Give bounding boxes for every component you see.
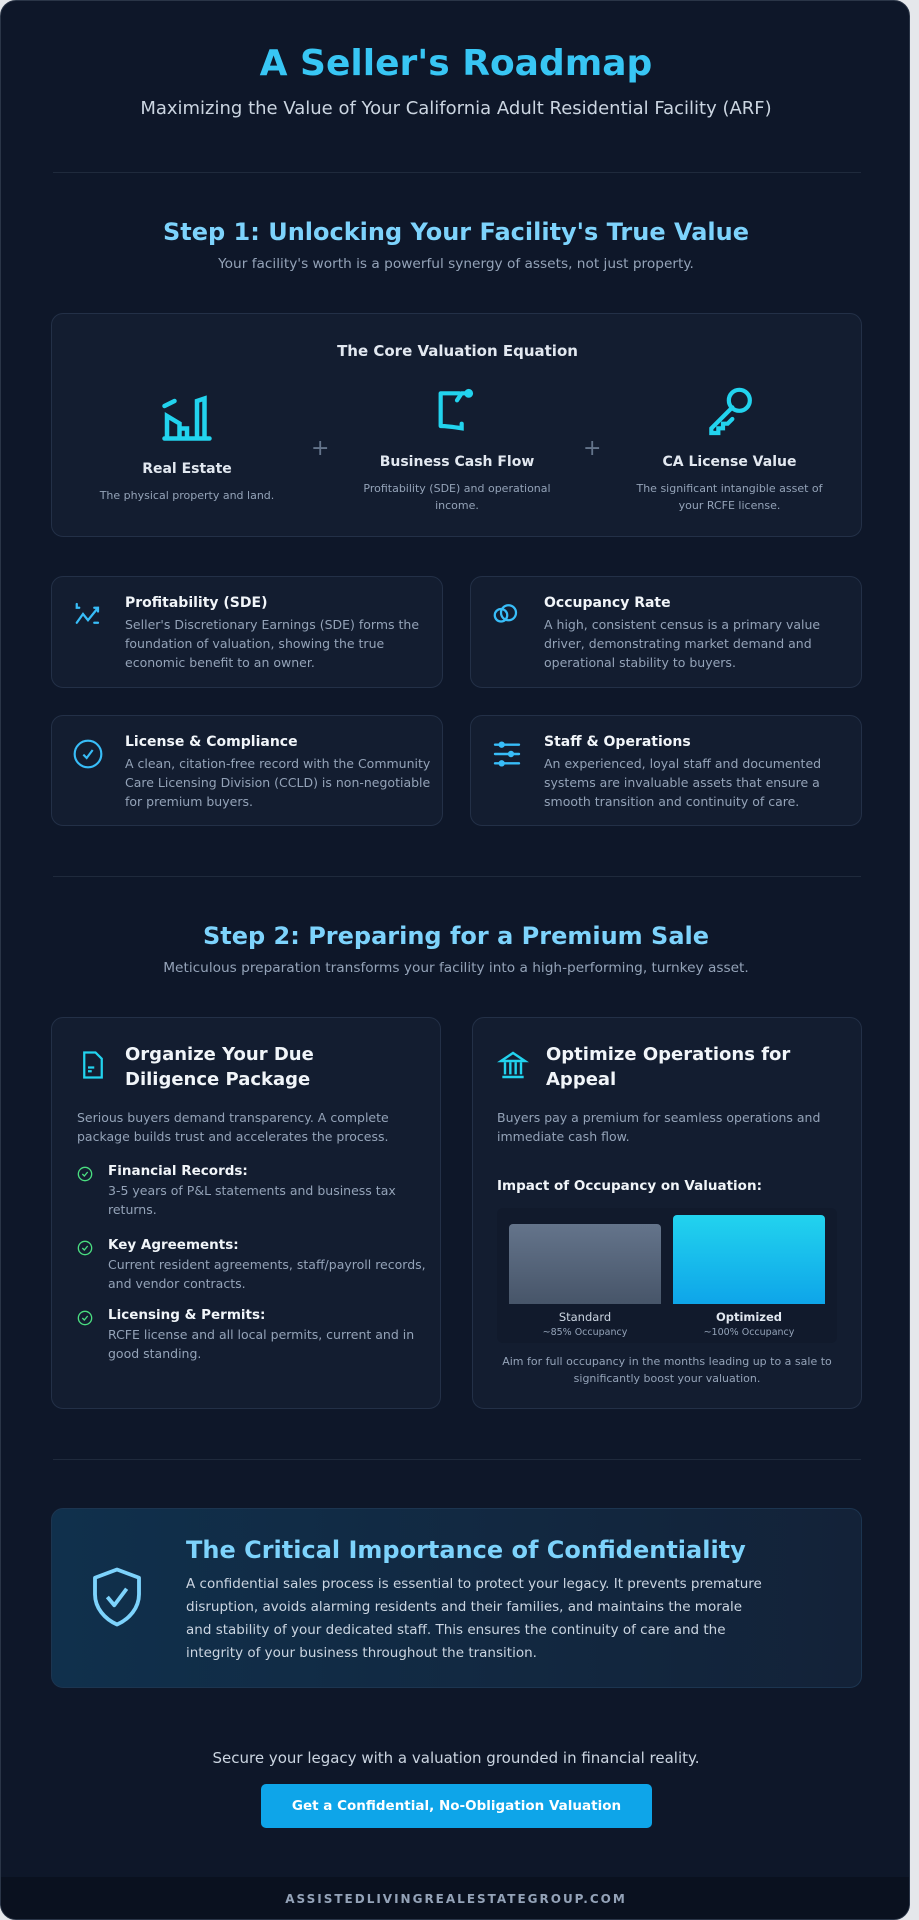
item: CA license value: The significant intangible asset of your RCFE license. bbox=[636, 482, 823, 512]
icon: circles bbox=[494, 604, 518, 623]
item: financial records bbox=[78, 1163, 396, 1217]
item: financial records: Financial Records: bbox=[108, 1163, 248, 1179]
card: staff & operations: Staff & Operations bbox=[544, 734, 691, 750]
bar chart bbox=[497, 1208, 837, 1343]
item: licensing & permits bbox=[78, 1307, 414, 1361]
panel: due diligence bbox=[51, 1017, 441, 1409]
item: real estate: The physical property and land. bbox=[100, 489, 274, 502]
label: standard: Standard bbox=[559, 1310, 611, 1324]
label: optimized: Optimized bbox=[716, 1310, 782, 1324]
card: occupancy rate bbox=[470, 576, 862, 688]
bar: standard bbox=[509, 1224, 661, 1304]
item: CA license value bbox=[636, 388, 823, 512]
label: standard bbox=[543, 1310, 627, 1338]
card: staff & operations bbox=[470, 715, 862, 826]
item: key agreements: Key Agreements: bbox=[108, 1237, 239, 1253]
CTA button bbox=[261, 1784, 652, 1828]
item: licensing & permits: Licensing & Permits: bbox=[108, 1307, 265, 1323]
step 1 heading: Step 1: Unlocking Your Facility's True Value bbox=[163, 218, 749, 246]
item: business cash flow bbox=[363, 388, 551, 512]
item: business cash flow: Business Cash Flow bbox=[380, 454, 534, 470]
step 1 subtext: Your facility's worth is a powerful synergy of assets, not just property. bbox=[218, 256, 694, 272]
footer bbox=[1, 1877, 911, 1920]
item: financial records: 3-5 years of P&L statements and business tax returns. bbox=[108, 1183, 396, 1217]
heading: Diligence Package bbox=[125, 1069, 310, 1090]
item: key agreements bbox=[78, 1237, 426, 1291]
card: staff & operations: An experienced, loyal staff and documented systems are invaluable assets that ensure a smooth transition and continuity of care. bbox=[544, 756, 821, 809]
card: license & compliance bbox=[51, 715, 443, 826]
card: profitability: Profitability (SDE) bbox=[125, 595, 267, 611]
heading: Appeal bbox=[546, 1069, 616, 1090]
CTA button: Get a Confidential, No-Obligation Valuation bbox=[292, 1798, 621, 1814]
icon: shield bbox=[93, 1568, 141, 1626]
icon: cash flow bbox=[438, 388, 474, 431]
heading: Organize Your Due bbox=[125, 1044, 314, 1065]
icon: bank building bbox=[497, 1052, 529, 1078]
footer: ASSISTEDLIVINGREALESTATEGROUP.COM bbox=[285, 1892, 627, 1906]
heading bbox=[546, 1044, 790, 1090]
label: optimized bbox=[704, 1310, 794, 1338]
card: license & compliance: License & Compliance bbox=[125, 734, 298, 750]
step 2 subtext: Meticulous preparation transforms your facility into a high-performing, turnkey asset. bbox=[163, 960, 749, 976]
CTA text: Secure your legacy with a valuation grounded in financial reality. bbox=[212, 1749, 700, 1767]
plus: + bbox=[311, 436, 329, 461]
panel: core valuation equation bbox=[51, 313, 862, 537]
item: business cash flow: Profitability (SDE) and operational income. bbox=[363, 482, 551, 512]
bar: optimized bbox=[673, 1215, 825, 1304]
callout: confidentiality bbox=[51, 1508, 862, 1688]
chart note: Aim for full occupancy in the months leading up to a sale to significantly boost your valuation. bbox=[502, 1355, 832, 1385]
icon: check circle bbox=[74, 740, 102, 768]
item: key agreements: Current resident agreements, staff/payroll records, and vendor contracts. bbox=[108, 1257, 426, 1291]
icon: document bbox=[83, 1051, 103, 1079]
icon: trend bbox=[76, 602, 100, 624]
icon: sliders bbox=[494, 742, 520, 766]
step 2 heading: Step 2: Preparing for a Premium Sale bbox=[203, 922, 709, 950]
heading bbox=[125, 1044, 314, 1090]
callout text: A confidential sales process is essential to protect your legacy. It prevents premature disruption, avoids alarming residents and their families, and maintains the morale and stability of your dedicated staff. This ensures the continuity of care and the integrity of your business throughout the transition. bbox=[186, 1576, 762, 1661]
card: profitability: Seller's Discretionary Earnings (SDE) forms the foundation of valuation, showing the true economic benefit to an owner. bbox=[125, 617, 419, 670]
item: real estate bbox=[100, 395, 274, 502]
card: occupancy rate: A high, consistent census is a primary value driver, demonstrating market demand and operational stability to buyers. bbox=[544, 617, 820, 670]
plus: + bbox=[583, 436, 601, 461]
label: standard: ~85% Occupancy bbox=[543, 1327, 627, 1338]
title: A Seller's Roadmap bbox=[260, 43, 652, 84]
label: optimized: ~100% Occupancy bbox=[704, 1327, 794, 1338]
item: licensing & permits: RCFE license and all local permits, current and in good standing. bbox=[108, 1327, 414, 1361]
panel: optimize operations bbox=[472, 1017, 862, 1409]
item: CA license value: CA License Value bbox=[663, 454, 796, 470]
icon: key bbox=[709, 388, 752, 436]
equation heading: The Core Valuation Equation bbox=[337, 342, 578, 360]
intro: Serious buyers demand transparency. A complete package builds trust and accelerates the process. bbox=[77, 1110, 389, 1144]
intro: Buyers pay a premium for seamless operations and immediate cash flow. bbox=[497, 1110, 820, 1144]
callout heading: The Critical Importance of Confidentiality bbox=[186, 1536, 746, 1564]
card: profitability bbox=[51, 576, 443, 688]
card: occupancy rate: Occupancy Rate bbox=[544, 595, 671, 611]
card: license & compliance: A clean, citation-free record with the Community Care Licensing Division (CCLD) is non-negotiable for premium buyers. bbox=[125, 756, 430, 809]
subtitle: Maximizing the Value of Your California Adult Residential Facility (ARF) bbox=[140, 98, 772, 119]
icon: building chart bbox=[162, 395, 212, 441]
heading: Optimize Operations for bbox=[546, 1044, 790, 1065]
chart title: Impact of Occupancy on Valuation: bbox=[497, 1178, 762, 1194]
item: real estate: Real Estate bbox=[142, 461, 232, 477]
